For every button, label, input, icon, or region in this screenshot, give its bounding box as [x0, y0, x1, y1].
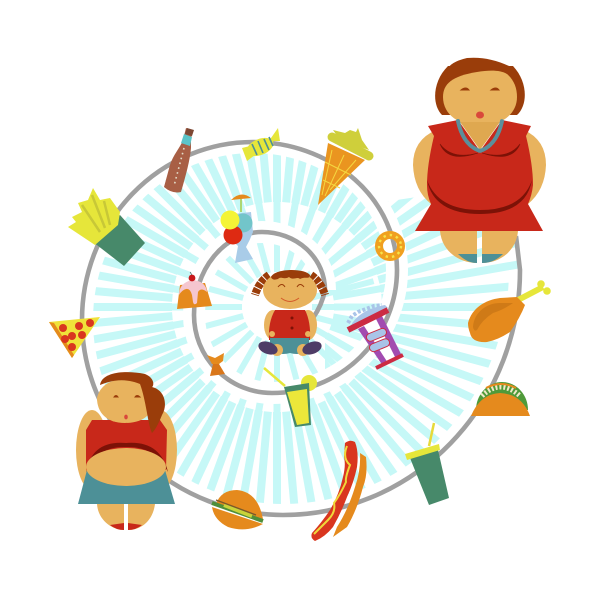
child sitting at centre: [255, 270, 325, 357]
food: popcorn box: [348, 305, 403, 368]
food: french fries in a box: [68, 188, 145, 266]
gray spiral path: [82, 142, 520, 515]
small woman with exposed belly: [76, 372, 177, 530]
food: hot dog: [311, 441, 367, 541]
food: taco: [471, 382, 530, 416]
food: ice cream cone: [318, 128, 369, 205]
food: lemonade glass with straw: [264, 368, 317, 427]
food: pizza slice: [49, 317, 100, 358]
food: cola bottle: [164, 128, 194, 192]
infographic: spiral of food and weight gain: [49, 58, 551, 541]
large woman in red dress: [413, 58, 546, 263]
food: ice cream sundae: [220, 194, 253, 263]
food: small sweet bag: [207, 353, 225, 376]
food: bagel with sprinkles: [379, 235, 401, 257]
food: chicken drumstick: [468, 280, 551, 342]
food: pudding cake with cherry: [177, 272, 212, 309]
food: tall green drink with straw: [405, 423, 449, 505]
radiating pale blue rays: [93, 154, 518, 504]
food: hamburger: [212, 490, 263, 529]
food: wrapped candy: [242, 128, 280, 161]
